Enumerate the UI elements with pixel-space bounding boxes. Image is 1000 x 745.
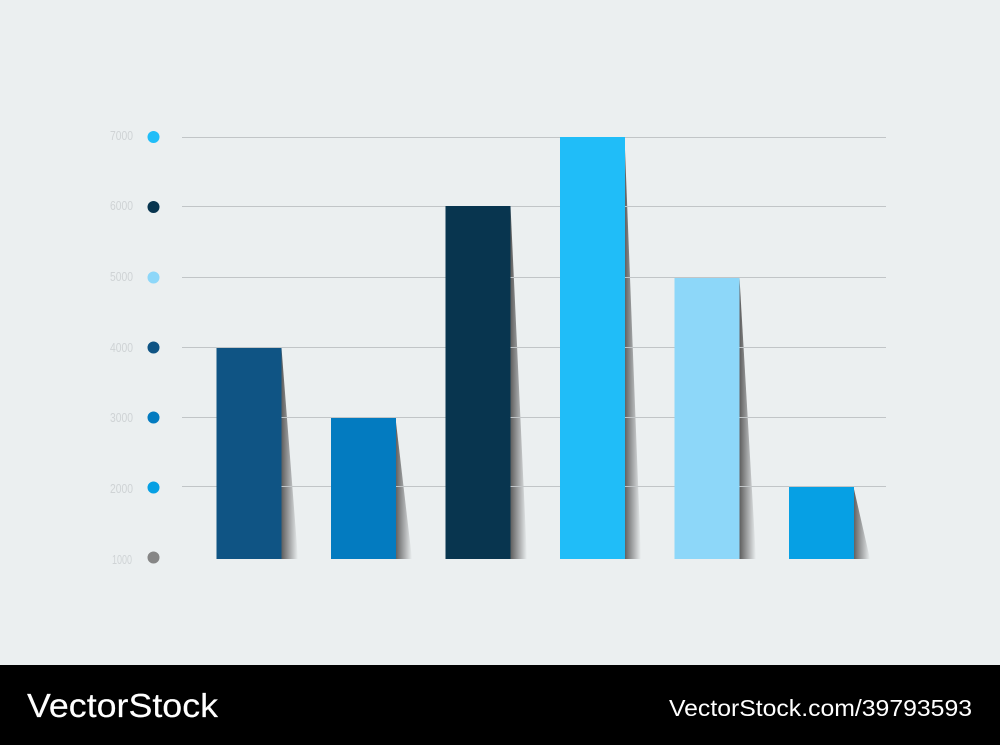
y-axis labels: 5000 xyxy=(110,269,133,284)
bar shadows xyxy=(282,137,870,559)
y-axis labels: 7000 xyxy=(110,128,133,143)
bar: 7000 xyxy=(560,137,625,559)
bar: 3000 xyxy=(331,418,396,559)
legend dots xyxy=(148,131,160,564)
footer band xyxy=(0,665,1000,745)
bar chart xyxy=(216,137,854,559)
bar: 6000 xyxy=(446,206,510,559)
footer url text: VectorStock.com/39793593 xyxy=(669,695,972,721)
y-axis labels: 1000 xyxy=(112,552,132,567)
y-axis labels: 3000 xyxy=(110,410,133,425)
bar: 4000 xyxy=(216,348,282,559)
bar: 5000 xyxy=(674,278,740,559)
y-axis labels xyxy=(110,128,133,567)
y-axis labels: 2000 xyxy=(110,481,133,496)
y-axis labels: 4000 xyxy=(110,340,133,355)
footer logo text: VectorStock xyxy=(27,687,219,724)
y-axis labels: 6000 xyxy=(110,198,133,213)
bar: 2000 xyxy=(789,487,854,559)
